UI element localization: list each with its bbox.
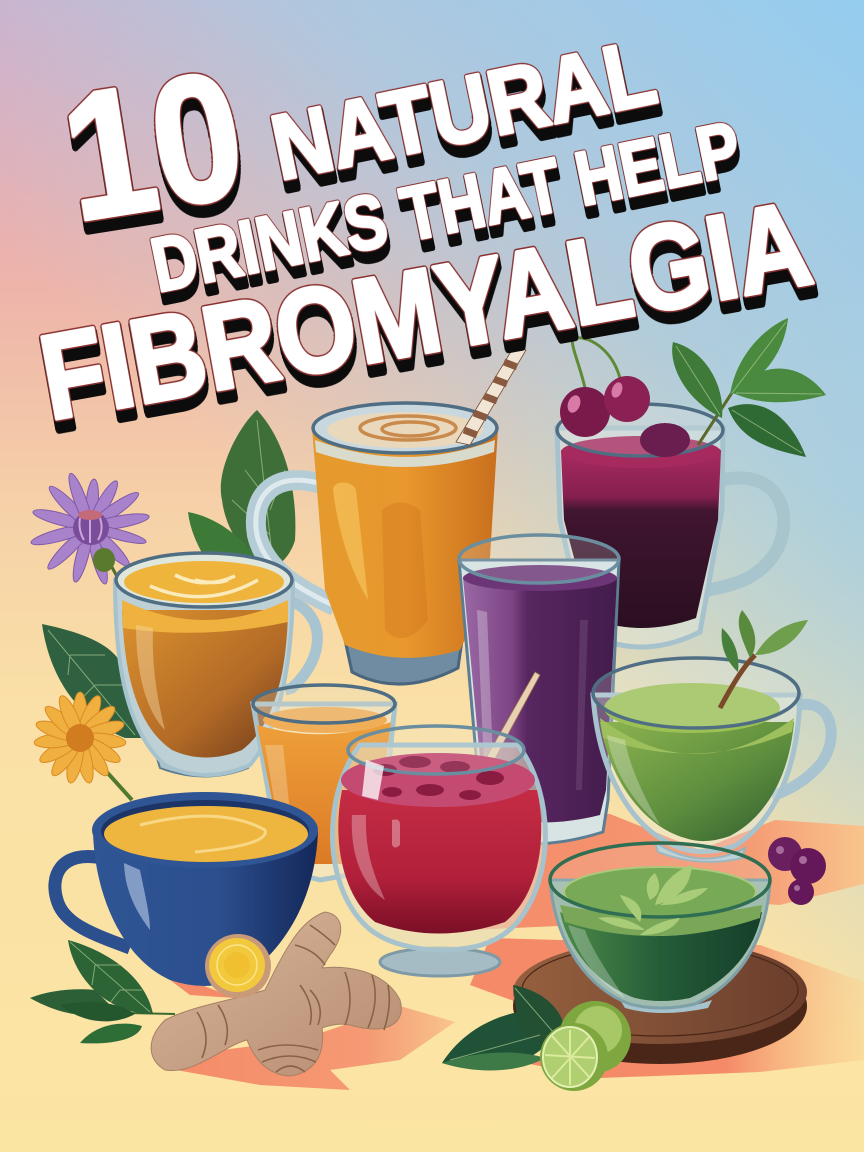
lime slice xyxy=(540,1023,608,1091)
drink: red juice glass xyxy=(332,672,545,976)
title line drinks that help: DRINKS THAT HELP xyxy=(144,106,747,309)
icon: leaves and limes bottom xyxy=(442,985,631,1091)
ginger slice xyxy=(205,934,271,998)
icon: leaves bottom left xyxy=(30,940,175,1043)
icon: green sprig xyxy=(720,610,808,708)
drink: small orange glass xyxy=(253,685,395,880)
table shadows xyxy=(150,810,864,1090)
drink: matcha bowl xyxy=(550,843,770,1013)
drink: blue soup cup xyxy=(55,792,318,986)
drink: dark purple mug with cherries xyxy=(557,318,826,647)
title word natural: NATURAL xyxy=(263,21,664,200)
straw xyxy=(456,345,526,445)
drink: green tea cup xyxy=(593,610,831,862)
lime xyxy=(559,1001,631,1073)
leaves behind amber mug xyxy=(188,410,295,570)
icon: yellow daisy xyxy=(34,692,132,800)
icon: herb in bowl xyxy=(598,865,708,935)
title line drinks that help: DRINKS THAT HELP xyxy=(144,106,747,309)
drink: tall purple glass xyxy=(459,535,619,844)
icon: berries right xyxy=(768,837,826,905)
wooden plate xyxy=(513,940,807,1064)
drink: amber mug xyxy=(115,553,317,776)
title word natural: NATURAL xyxy=(263,21,664,200)
icon: cherries xyxy=(560,338,650,437)
drink: large orange mug with latte xyxy=(256,345,526,684)
title number 10: 10 xyxy=(51,33,256,260)
icon: large leaf left xyxy=(42,624,143,738)
title number 10: 10 xyxy=(51,33,256,260)
icon: purple flower xyxy=(30,471,150,586)
icon: ginger root xyxy=(151,912,401,1076)
title xyxy=(31,21,820,446)
icon: mint sprig xyxy=(672,318,826,457)
